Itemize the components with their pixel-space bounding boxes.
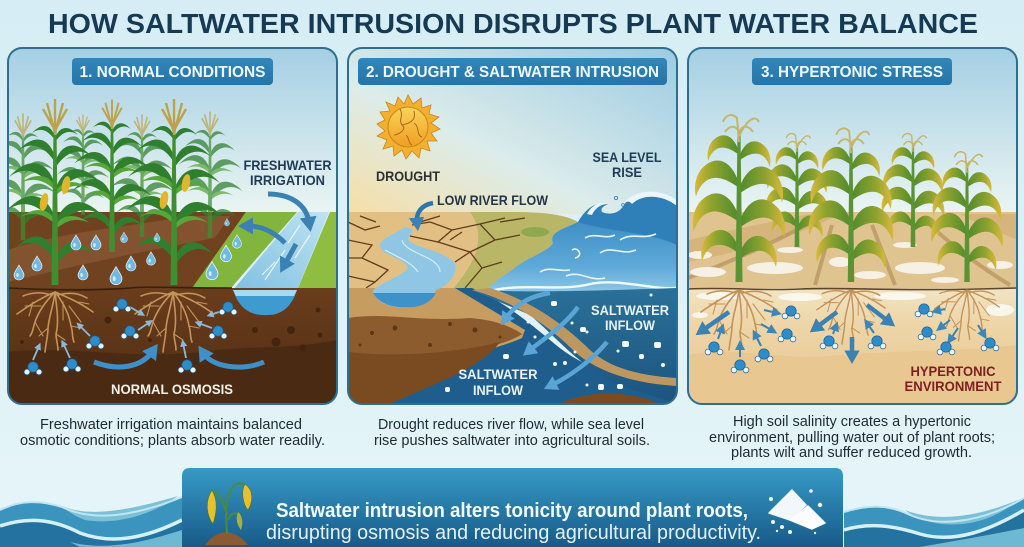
heading 3: 3. HYPERTONIC STRESS (761, 64, 943, 81)
title: HOW SALTWATER INTRUSION DISRUPTS PLANT WATER BALANCE (48, 8, 978, 39)
panel: drought and saltwater intrusion (348, 48, 677, 404)
wave crest (578, 192, 677, 245)
corn plants middle (72, 99, 152, 252)
label: saltwater inflow right: INFLOW (605, 317, 656, 333)
salt speckle (692, 292, 1014, 318)
caption panel 3: plants wilt and suffer reduced growth. (731, 445, 972, 461)
panel border (8, 48, 337, 404)
icon: wilted plant (205, 483, 252, 545)
salt-crusted field (688, 212, 1017, 290)
label: saltwater inflow bottom: SALTWATER (458, 366, 538, 382)
label: low river flow: LOW RIVER FLOW (437, 192, 549, 208)
sea foam and ripples (540, 234, 656, 279)
caption panel 3 (709, 414, 995, 461)
text: banner message: Saltwater intrusion alters tonicity around plant roots, (276, 500, 748, 522)
water droplets (14, 218, 242, 285)
roots (701, 290, 999, 350)
caption panel 1: osmotic conditions; plants absorb water readily. (20, 433, 325, 449)
label: saltwater inflow right: SALTWATER (591, 302, 669, 318)
water loss arrows (703, 305, 888, 355)
salt crystals (445, 294, 665, 392)
river (373, 227, 456, 307)
text: banner message line 2: disrupting osmosis and reducing agricultural productivity. (266, 522, 761, 544)
irrigation arrows (248, 194, 309, 264)
caption panel 2 (374, 417, 650, 449)
bottom waves left (0, 496, 182, 547)
underground layers (392, 288, 670, 403)
saltwater inflow arrows (417, 203, 607, 385)
wilting corn plants front (693, 115, 1003, 282)
label: freshwater irrigation: IRRIGATION (250, 172, 325, 188)
caption panel 1: Freshwater irrigation maintains balanced (40, 417, 302, 433)
irrigation canal (233, 212, 329, 290)
panel border (688, 48, 1017, 404)
small water arrows (718, 309, 984, 357)
water molecules (705, 304, 999, 373)
label: drought: DROUGHT (376, 168, 440, 184)
caption panel 3: High soil salinity creates a hypertonic (733, 414, 971, 430)
soil surface line (688, 288, 1017, 290)
subsoil (688, 288, 1017, 404)
panel: normal conditions (0, 48, 337, 404)
soil surface line (8, 287, 232, 290)
panel: hypertonic stress (688, 48, 1017, 404)
sky (688, 48, 1017, 214)
sea surface (486, 222, 677, 296)
caption panel 2: rise pushes saltwater into agricultural soils. (374, 433, 650, 449)
heading pill 1 (72, 58, 273, 85)
label: hypertonic environment: HYPERTONIC (910, 363, 996, 379)
label: sea level rise: RISE (612, 164, 642, 180)
label: sea level rise: SEA LEVEL (592, 149, 662, 165)
banner (182, 468, 843, 547)
soil flecks (358, 322, 502, 347)
osmosis arrows (94, 352, 264, 367)
corn plants back row (0, 112, 243, 240)
caption panel 1 (20, 417, 325, 449)
sandy layer band (472, 288, 677, 386)
small water arrows (33, 307, 222, 360)
heading pill 3 (752, 58, 952, 85)
label: saltwater inflow bottom: INFLOW (473, 382, 524, 398)
sky (8, 48, 337, 214)
label: normal osmosis: NORMAL OSMOSIS (111, 381, 233, 397)
icon: cracked sun (377, 95, 440, 159)
heading pill 2 (358, 58, 667, 85)
land (348, 212, 578, 292)
sky (348, 48, 677, 214)
caption panel 2: Drought reduces river flow, while sea level (378, 417, 644, 433)
bottom waves right (844, 498, 1024, 547)
label: freshwater irrigation: FRESHWATER (244, 157, 332, 173)
canal water channel (233, 290, 297, 315)
underground soil (9, 288, 336, 354)
water molecules (24, 299, 237, 375)
heading 2: 2. DROUGHT & SALTWATER INTRUSION (366, 64, 659, 81)
ground cracks (348, 216, 525, 288)
corn plants front (7, 99, 222, 285)
furrows (688, 220, 1010, 285)
heading 1: 1. NORMAL CONDITIONS (80, 64, 266, 81)
icon: salt piles (769, 489, 825, 534)
label: hypertonic environment: ENVIRONMENT (904, 378, 1002, 394)
roots (17, 292, 211, 352)
panel border (348, 48, 677, 404)
caption panel 3: environment, pulling water out of plant roots; (709, 430, 995, 446)
salt patches (688, 242, 1013, 283)
wilting corn plants back (766, 133, 944, 247)
green irrigated field (192, 212, 297, 288)
field soil (8, 212, 246, 290)
